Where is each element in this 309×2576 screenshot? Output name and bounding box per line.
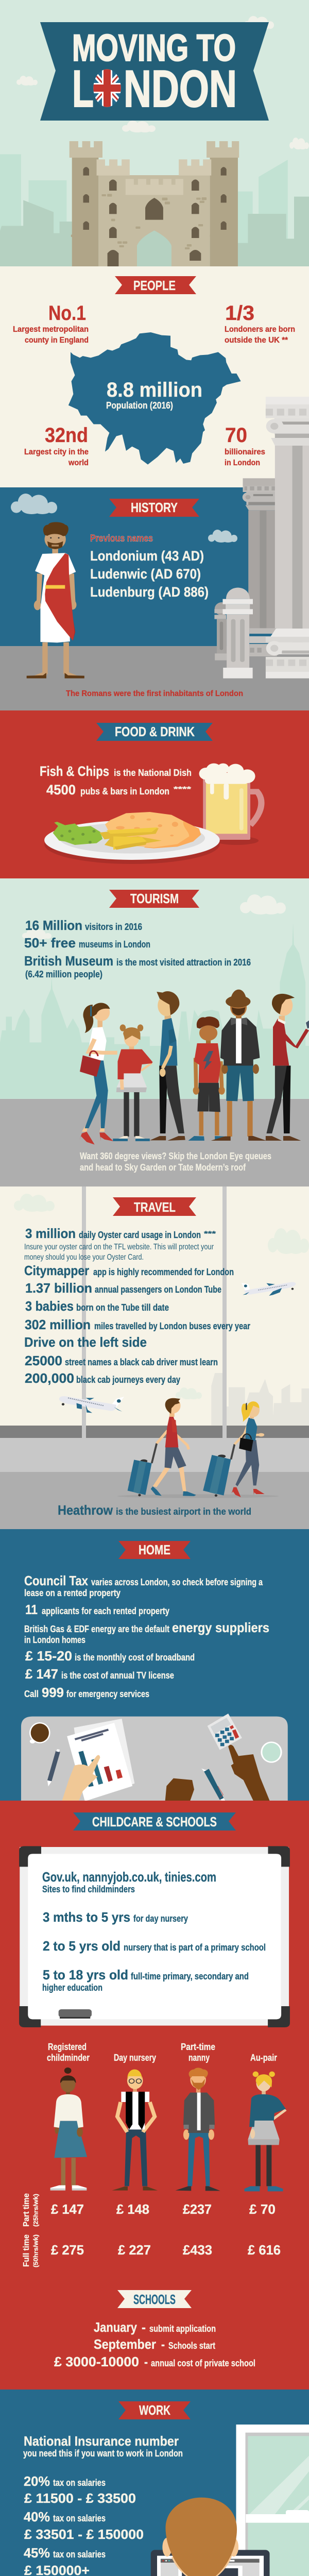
labels: childcare types: Registered	[48, 2042, 87, 2052]
text: fish and chips	[40, 764, 192, 798]
figure: day nursery worker	[112, 2070, 158, 2191]
stat: No.1: Largest metropolitan	[13, 325, 89, 334]
text: childcare facts: Sites to find childminders	[42, 1884, 135, 1894]
text: travel facts: 25000	[25, 1353, 62, 1368]
text: national insurance and tax bands: £ 11500 - £ 33500	[24, 2490, 136, 2506]
labels: childcare types: Day nursery	[114, 2053, 156, 2063]
panel: food and drink	[0, 710, 309, 878]
text: home facts	[24, 1573, 269, 1700]
map: greater London: Population (2016)	[106, 400, 173, 411]
illustration: fish and chips plate	[44, 812, 220, 864]
figure: man with phone	[266, 994, 309, 1141]
text: travel facts: Drive on the left side	[24, 1334, 147, 1350]
text: tourism facts: (6.42 million people)	[25, 969, 102, 979]
heading: childcare and schools: CHILDCARE & SCHOOLS	[92, 1815, 217, 1829]
text: travel facts: black cab journeys every day	[76, 1375, 180, 1385]
heading: food and drink	[96, 723, 213, 741]
figure: woman with suitcase	[203, 1401, 265, 1497]
map: greater London	[68, 332, 241, 465]
text: childcare facts: for day nursery	[133, 1913, 188, 1924]
text: childcare facts: Gov.uk, nannyjob.co.uk, tinies.com	[42, 1869, 216, 1885]
text: travel facts: ***	[204, 1229, 216, 1238]
text: school facts: January	[94, 2319, 137, 2335]
text: home facts: Call	[24, 1689, 39, 1699]
text: childcare facts: nursery that is part of a primary school	[124, 1942, 266, 1953]
illustration: childcare figures	[50, 2067, 286, 2191]
figure: au-pair	[245, 2072, 286, 2191]
text: home facts: energy suppliers	[172, 1620, 269, 1635]
text: school facts: September	[94, 2336, 156, 2352]
whiteboard	[19, 1846, 290, 2027]
labels: childcare types: Part-time	[181, 2042, 215, 2052]
caption: 360 degree views: Want 360 degree views? Skip the London Eye queues	[80, 1151, 271, 1161]
text: childcare facts: 5 to 18 yrs old	[43, 1967, 128, 1982]
heading: home: HOME	[139, 1543, 170, 1557]
text: school facts: submit application	[149, 2324, 216, 2334]
heading: history: HISTORY	[131, 501, 178, 515]
text: childcare facts: higher education	[42, 1982, 102, 1993]
figure: boy with lightning t-shirt	[188, 1016, 231, 1141]
panel: header	[0, 0, 309, 266]
row labels: part time and full time	[22, 2193, 39, 2267]
heading: travel: TRAVEL	[134, 1200, 176, 1215]
clouds: header	[16, 16, 309, 149]
text: home facts: £ 15-20	[25, 1648, 72, 1664]
labels: childcare types: nanny	[188, 2053, 210, 2063]
stat: No.1: No.1	[48, 302, 86, 325]
heading: schools	[117, 2290, 192, 2308]
text: childcare facts: 3 mths to 5 yrs	[43, 1909, 130, 1925]
price table: £237	[183, 2201, 212, 2217]
text: travel facts: daily Oyster card usage in London	[79, 1230, 201, 1240]
text: home facts: in London homes	[24, 1635, 85, 1645]
row labels: part time and full time: (50hrs/wk)	[32, 2234, 39, 2267]
panel: people	[0, 266, 309, 487]
text: travel facts: born on the Tube till date	[76, 1302, 169, 1313]
text: tourism facts: is the most visited attraction in 2016	[116, 957, 251, 968]
panel: travel	[0, 1187, 309, 1529]
text: home facts: applicants for each rented property	[42, 1606, 169, 1616]
text: previous names: Previous names	[90, 533, 153, 544]
text: travel facts: miles travelled by London buses every year	[94, 1321, 250, 1331]
heading: people: PEOPLE	[133, 279, 176, 293]
heading: work: WORK	[139, 2403, 170, 2418]
labels: childcare types: Au-pair	[250, 2053, 277, 2063]
text: national insurance and tax bands: tax on salaries	[53, 2549, 106, 2560]
map: greater London: 8.8 million	[107, 379, 202, 401]
price table: £ 147	[51, 2201, 84, 2217]
heading: tourism	[109, 890, 199, 908]
text: national insurance and tax bands: you need this if you want to work in London	[23, 2448, 183, 2459]
stat: 1/3: 1/3	[225, 302, 254, 325]
price table: £ 227	[118, 2242, 151, 2258]
text: school facts: -	[142, 2319, 146, 2335]
clouds: tourism	[22, 894, 286, 939]
text: previous names: Londonium (43 AD)	[90, 548, 204, 564]
panel: home	[0, 1529, 309, 1801]
title text: L	[72, 60, 94, 118]
stat: 70	[225, 424, 265, 467]
title text	[72, 27, 237, 118]
caption: heathrow: Heathrow	[58, 1502, 113, 1518]
clouds: history	[11, 494, 237, 543]
text: school facts: annual cost of private school	[151, 2358, 255, 2368]
stat: No.1: county in England	[25, 336, 89, 345]
text: home facts: is the monthly cost of broadband	[75, 1652, 195, 1663]
caption: romans: The Romans were the first inhabitants of London	[66, 689, 243, 698]
text: home facts: £ 147	[25, 1666, 58, 1682]
skyline: airport window view	[211, 1373, 309, 1426]
text: national insurance and tax bands	[23, 2433, 183, 2576]
heading: food and drink: FOOD & DRINK	[115, 725, 195, 739]
row labels: part time and full time: Full time	[22, 2234, 31, 2267]
panel: work	[0, 2389, 309, 2576]
stat: 70: in London	[225, 459, 260, 467]
icon: beer mug	[199, 764, 261, 845]
text: fish and chips: pubs & bars in London	[80, 786, 169, 796]
heading: history	[109, 499, 199, 517]
text: previous names: Ludenburg (AD 886)	[90, 584, 209, 600]
illustration: travellers with suitcases	[117, 1398, 279, 1498]
stat: 1/3	[225, 302, 295, 345]
text: previous names: Ludenwic (AD 670)	[90, 566, 201, 582]
row labels: part time and full time: Part time	[22, 2193, 31, 2227]
title text: NDON	[124, 60, 237, 118]
text: school facts: Schools start	[168, 2341, 215, 2351]
text: travel facts: 200,000	[25, 1370, 74, 1386]
price table: £ 148	[116, 2201, 149, 2217]
figure: man with suitcase	[128, 1398, 196, 1496]
text: tourism facts: 50+ free	[24, 935, 76, 951]
illustration: roman man in toga	[27, 522, 84, 679]
title text: MOVING TO	[72, 27, 236, 69]
text: travel facts: app is highly recommended for London	[93, 1267, 234, 1277]
text: national insurance and tax bands: £ 33501 - £ 150000	[24, 2527, 144, 2542]
text: school facts: -	[144, 2354, 148, 2369]
text: childcare facts: 2 to 5 yrs old	[43, 1938, 121, 1954]
text: travel facts: Citymapper	[24, 1263, 89, 1278]
stat: 70: 70	[225, 424, 247, 447]
text: fish and chips: ****	[174, 785, 192, 793]
text: childcare facts: full-time primary, secondary and	[131, 1971, 249, 1981]
text: travel facts: 3 babies	[25, 1298, 74, 1314]
clouds: travel	[14, 1194, 309, 1399]
price table	[51, 2201, 281, 2258]
heading: childcare and schools	[73, 1812, 236, 1831]
icon: fallen column ruins	[214, 588, 309, 679]
figure: girl	[113, 1024, 153, 1141]
text: fish and chips: 4500	[46, 782, 76, 798]
panel: childcare and schools	[0, 1801, 309, 2389]
text: home facts: 11	[25, 1602, 38, 1617]
figure: man in teal shirt	[150, 991, 185, 1141]
panel: history	[0, 397, 309, 710]
text: national insurance and tax bands: tax on salaries	[53, 2478, 106, 2488]
icon: plane right	[242, 1282, 296, 1296]
icon: union jack letter O	[93, 69, 121, 107]
text: travel facts: 302 million	[25, 1317, 91, 1332]
text: home facts: Council Tax	[24, 1573, 88, 1588]
heading: tourism: TOURISM	[130, 892, 179, 906]
icon: castle	[70, 141, 239, 266]
figure: registered childminder	[50, 2067, 87, 2191]
text: national insurance and tax bands: 40%	[24, 2509, 50, 2524]
labels: childcare types	[47, 2042, 277, 2063]
stat: 1/3: Londoners are born	[225, 325, 295, 334]
stat: No.1	[13, 302, 89, 345]
heading: work	[118, 2401, 191, 2419]
text: home facts: varies across London, so check before signing a	[91, 1577, 263, 1587]
text: national insurance and tax bands: 45%	[24, 2545, 50, 2561]
text: home facts: is the cost of annual TV license	[61, 1670, 174, 1681]
text: fish and chips: is the National Dish	[114, 768, 192, 778]
window	[236, 2425, 309, 2576]
text: childcare facts	[42, 1869, 266, 1993]
icon: union jack letter O: O	[94, 60, 121, 118]
text: school facts: -	[161, 2336, 165, 2352]
figure: woman with ponytail	[79, 1003, 117, 1145]
labels: childcare types: childminder	[47, 2053, 90, 2063]
caption: heathrow	[58, 1502, 251, 1518]
icon: roman columns	[243, 397, 309, 646]
heading: travel	[113, 1197, 196, 1216]
price table: £ 275	[51, 2242, 84, 2258]
text: tourism facts: museums in London	[79, 939, 150, 950]
text: home facts: British Gas & EDF energy are the default	[24, 1624, 169, 1634]
price table: £ 616	[248, 2242, 281, 2258]
stat: 1/3: outside the UK **	[225, 336, 288, 345]
text: national insurance and tax bands: 20%	[24, 2473, 50, 2489]
caption: heathrow: is the busiest airport in the world	[116, 1506, 251, 1517]
skyline: header background	[0, 154, 309, 266]
illustration: tourists group	[79, 990, 309, 1145]
text: national insurance and tax bands: National Insurance number	[24, 2433, 179, 2449]
figure: part-time nanny	[176, 2068, 220, 2191]
text: home facts: lease on a rented property	[24, 1588, 121, 1598]
title banner	[40, 22, 269, 121]
text: school facts: £ 3000-10000	[54, 2354, 139, 2369]
text: school facts	[54, 2319, 255, 2369]
caption: 360 degree views	[80, 1151, 271, 1173]
text: fish and chips: Fish & Chips	[40, 764, 109, 779]
figure: man with hat and jacket	[211, 990, 266, 1141]
text: previous names	[90, 533, 209, 600]
price table: £ 70	[249, 2201, 276, 2217]
text: tourism facts: British Museum	[24, 953, 113, 969]
row labels: part time and full time: (25hrs/wk)	[32, 2194, 39, 2227]
heading: people	[115, 276, 196, 294]
illustration: desk with paperwork	[21, 1714, 288, 1801]
text: travel facts: 3 million	[25, 1226, 76, 1241]
icon: plane left	[59, 1396, 124, 1413]
text: tourism facts	[24, 918, 251, 979]
text: travel facts: Insure your oyster card on the TFL website. This will protect your	[24, 1243, 214, 1251]
laptop	[136, 2550, 284, 2576]
heading: home	[118, 1541, 191, 1559]
text: home facts: 999	[42, 1685, 64, 1700]
stat: 32nd: Largest city in the	[24, 448, 89, 456]
illustration: person at laptop by window	[71, 2425, 309, 2576]
price table: £433	[183, 2242, 212, 2258]
text: tourism facts: 16 Million	[25, 918, 82, 933]
text: tourism facts: visitors in 2016	[85, 922, 142, 932]
stat: 32nd: 32nd	[45, 424, 88, 447]
stat: 32nd	[24, 424, 89, 467]
text: home facts: for emergency services	[66, 1689, 149, 1699]
person from behind	[149, 2498, 254, 2576]
text: national insurance and tax bands: tax on salaries	[53, 2513, 106, 2523]
panel: tourism	[0, 878, 309, 1187]
heading: schools: SCHOOLS	[133, 2293, 176, 2307]
text: travel facts: money should you lose your Oyster Card.	[24, 1253, 144, 1262]
text: travel facts: 1.37 billion	[25, 1280, 92, 1296]
text: travel facts: street names a black cab driver must learn	[65, 1357, 218, 1367]
skyline: tourism background	[0, 923, 309, 1099]
caption: 360 degree views: and head to Sky Garden or Tate Modern’s roof	[80, 1162, 246, 1173]
text: travel facts: annual passengers on London Tube	[95, 1284, 221, 1295]
text: travel facts	[24, 1226, 250, 1386]
stat: 32nd: world	[68, 459, 89, 467]
stat: 70: billionaires	[225, 448, 265, 456]
